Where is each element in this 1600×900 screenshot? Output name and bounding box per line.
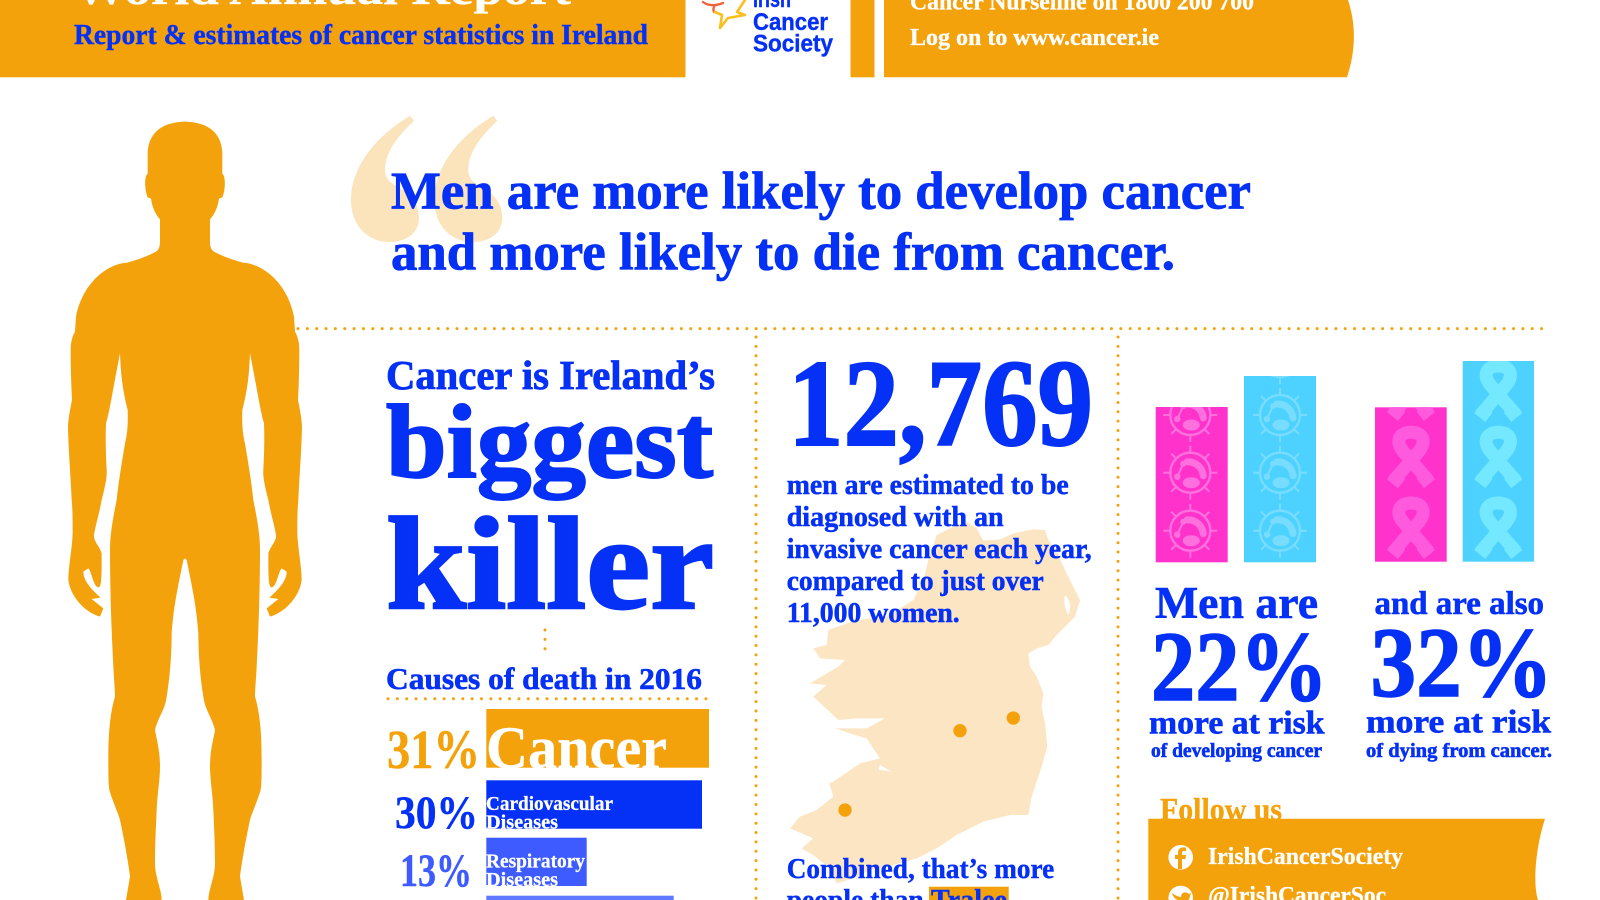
heading: biggest killer (386, 352, 715, 637)
panel: follow us (1148, 791, 1545, 900)
stat: 32% more at risk: 32% (1370, 607, 1553, 718)
chart: risk of developing cancer (1156, 376, 1316, 562)
header banner: report title (0, 0, 686, 77)
heading: biggest killer: killer (386, 490, 714, 637)
bar: cardiovascular diseases 30% (395, 780, 702, 839)
bar: respiratory diseases 13%: 13% (400, 845, 472, 897)
text block: men estimated diagnoses: men are estimated to be (787, 470, 1069, 501)
logo: Irish Cancer Society: Society (753, 30, 834, 58)
icon: twitter (1168, 886, 1193, 900)
stat: 22% more at risk: of developing cancer (1151, 740, 1322, 762)
headline quote (391, 162, 1251, 282)
bar: cancer 31%: 31% (387, 719, 480, 780)
bar: cancer 31%: Cancer (486, 715, 667, 781)
figure: male body silhouette (68, 122, 302, 900)
bar: women (1375, 407, 1447, 562)
bar: respiratory diseases 13%: Diseases (486, 869, 558, 891)
icon: quotation marks (351, 116, 502, 242)
bar: cardiovascular diseases 30%: Diseases (486, 811, 558, 833)
bar: respiratory diseases 13%: Respiratory (486, 850, 585, 872)
text block: men estimated diagnoses: compared to just over (787, 566, 1044, 597)
stat: 22% more at risk: Men are (1155, 578, 1318, 628)
logo: Irish Cancer Society: Cancer (753, 9, 828, 36)
logo: Irish Cancer Society (703, 0, 834, 58)
text block: men estimated diagnoses: diagnosed with an (787, 502, 1004, 533)
icon: facebook (1168, 845, 1193, 870)
bar: cardiovascular diseases 30%: 30% (395, 787, 478, 839)
bar: cardiovascular diseases 30%: Cardiovascular (486, 793, 613, 815)
header banner: contact details: Log on to www.cancer.ie (910, 25, 1159, 51)
bar: respiratory diseases 13% (400, 838, 587, 897)
map: Ireland with three dots (790, 522, 1080, 883)
bar: fourth cause (486, 896, 674, 900)
header divider bar (850, 0, 874, 77)
heading: biggest killer: Cancer is Ireland’s (386, 352, 715, 398)
text block: combined comparison: Combined, that’s more (787, 854, 1054, 885)
text block: men estimated diagnoses: invasive cancer each year, (787, 534, 1092, 565)
text block: combined comparison (787, 854, 1054, 900)
headline quote: Men are more likely to develop cancer (391, 162, 1251, 220)
text block: men estimated diagnoses: 11,000 women. (787, 598, 960, 629)
subtitle: Report & estimates of cancer statistics in Ireland (74, 20, 648, 51)
bar: men (1244, 376, 1316, 562)
stat: 32% more at risk (1366, 586, 1553, 762)
chart heading: Causes of death in 2016 (386, 661, 702, 696)
stat: 22% more at risk: more at risk (1149, 706, 1325, 742)
heading: Follow us (1160, 791, 1282, 827)
panel: follow us: IrishCancerSociety (1208, 844, 1403, 870)
bar: cancer 31% (387, 709, 709, 781)
header banner: contact details (884, 0, 1354, 77)
headline quote: and more likely to die from cancer. (391, 224, 1175, 282)
bar: women (1156, 407, 1228, 562)
big number: 12,769: 12,769 (788, 335, 1093, 472)
heading: biggest killer: biggest (386, 383, 713, 500)
bar chart: causes of death in 2016 (386, 661, 709, 900)
icon: daffodil (703, 0, 745, 28)
stat: 32% more at risk: and are also (1374, 586, 1544, 622)
chart: risk of dying from cancer (1375, 361, 1534, 562)
stat: 32% more at risk: more at risk (1366, 705, 1552, 741)
stat: 22% more at risk (1149, 578, 1328, 762)
stat: 32% more at risk: of dying from cancer. (1366, 740, 1552, 762)
text block: men estimated diagnoses (787, 470, 1092, 629)
bar: men (1463, 361, 1534, 562)
stat: 22% more at risk: 22% (1151, 611, 1328, 722)
